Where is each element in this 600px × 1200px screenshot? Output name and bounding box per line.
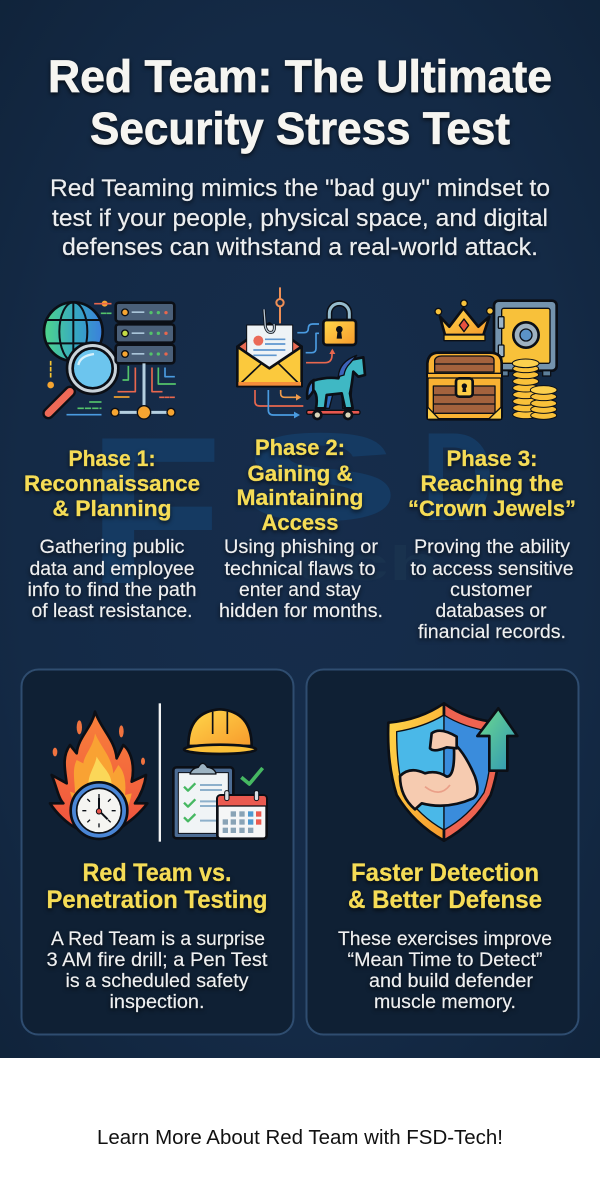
phase 2 heading: Gaining & xyxy=(248,461,352,486)
watermark logo: S xyxy=(240,408,400,547)
red team description xyxy=(46,929,268,1013)
intro text: defenses can withstand a real-world attack. xyxy=(62,234,538,261)
red team description: inspection. xyxy=(110,992,204,1013)
phase 3 heading: Phase 3: xyxy=(446,446,538,471)
faster detection description: muscle memory. xyxy=(374,992,516,1013)
phase 2 heading: Maintaining xyxy=(236,485,364,510)
phase 2 heading xyxy=(236,435,364,535)
icon: crown, safe, chest and coins xyxy=(427,300,557,419)
phase 2 description: enter and stay xyxy=(239,580,361,601)
panel: red team vs penetration testing xyxy=(22,670,294,1034)
faster detection heading xyxy=(348,859,542,914)
phase 1 column xyxy=(24,446,200,622)
faster detection description: “Mean Time to Detect” xyxy=(348,950,542,971)
title xyxy=(48,51,552,154)
phase 3 description: to access sensitive xyxy=(410,559,574,580)
red team heading: Penetration Testing xyxy=(46,886,268,914)
red team heading xyxy=(46,859,268,914)
faster detection heading: Faster Detection xyxy=(351,859,539,887)
phase 1 description: of least resistance. xyxy=(32,601,192,622)
title: Red Team: The Ultimate xyxy=(48,51,552,102)
title: Security Stress Test xyxy=(90,103,510,154)
phase 1 description: Gathering public xyxy=(40,537,184,558)
phase 1 heading: & Planning xyxy=(52,496,172,521)
phase 2 description: hidden for months. xyxy=(219,601,383,622)
red team description: 3 AM fire drill; a Pen Test xyxy=(46,950,268,971)
phase 3 heading: Reaching the xyxy=(420,471,564,496)
intro text: test if your people, physical space, and digital xyxy=(52,205,548,232)
phase 2 description xyxy=(219,537,383,622)
phase 3 description: customer xyxy=(450,580,533,601)
phase 2 description: Using phishing or xyxy=(224,537,379,558)
phase 1 heading: Reconnaissance xyxy=(24,471,200,496)
icon: phishing envelope, lock and trojan horse xyxy=(237,287,365,419)
phase 3 description: Proving the ability xyxy=(414,537,571,558)
footer call to action: Learn More About Red Team with FSD-Tech! xyxy=(97,1127,503,1149)
faster detection description: and build defender xyxy=(369,971,534,992)
watermark logo: D xyxy=(422,408,494,547)
watermark logo: Tech xyxy=(250,538,440,591)
phase 3 description: financial records. xyxy=(418,622,566,643)
phase 1 heading xyxy=(24,446,200,521)
panel: faster detection and better defense xyxy=(306,670,578,1034)
phase 2 column xyxy=(219,435,383,622)
phase 1 description xyxy=(28,537,196,622)
watermark logo: F xyxy=(88,393,222,628)
faster detection description: These exercises improve xyxy=(338,929,552,950)
phase 3 heading: “Crown Jewels” xyxy=(408,496,576,521)
red team description: is a scheduled safety xyxy=(66,971,249,992)
icon: burning clock and safety inspection xyxy=(50,703,267,842)
phase 3 heading xyxy=(408,446,576,521)
phase 1 description: data and employee xyxy=(30,559,194,580)
icon: shield with flexed arm and up arrow xyxy=(388,703,517,841)
phase 2 heading: Access xyxy=(262,510,338,535)
red team heading: Red Team vs. xyxy=(82,859,232,887)
phase 1 description: info to find the path xyxy=(28,580,196,601)
phase 3 column xyxy=(408,446,576,643)
watermark logo xyxy=(88,393,494,628)
intro text: Red Teaming mimics the "bad guy" mindset to xyxy=(50,175,550,202)
phase 2 heading: Phase 2: xyxy=(255,435,345,460)
icon: globe, magnifier and servers xyxy=(44,301,175,419)
phase 3 description xyxy=(410,537,574,643)
red team description: A Red Team is a surprise xyxy=(51,929,265,950)
phase 3 description: databases or xyxy=(436,601,547,622)
phase 1 heading: Phase 1: xyxy=(68,446,156,471)
intro text xyxy=(50,175,550,261)
faster detection description xyxy=(338,929,552,1013)
phase 2 description: technical flaws to xyxy=(224,559,376,580)
faster detection heading: & Better Defense xyxy=(348,886,542,914)
